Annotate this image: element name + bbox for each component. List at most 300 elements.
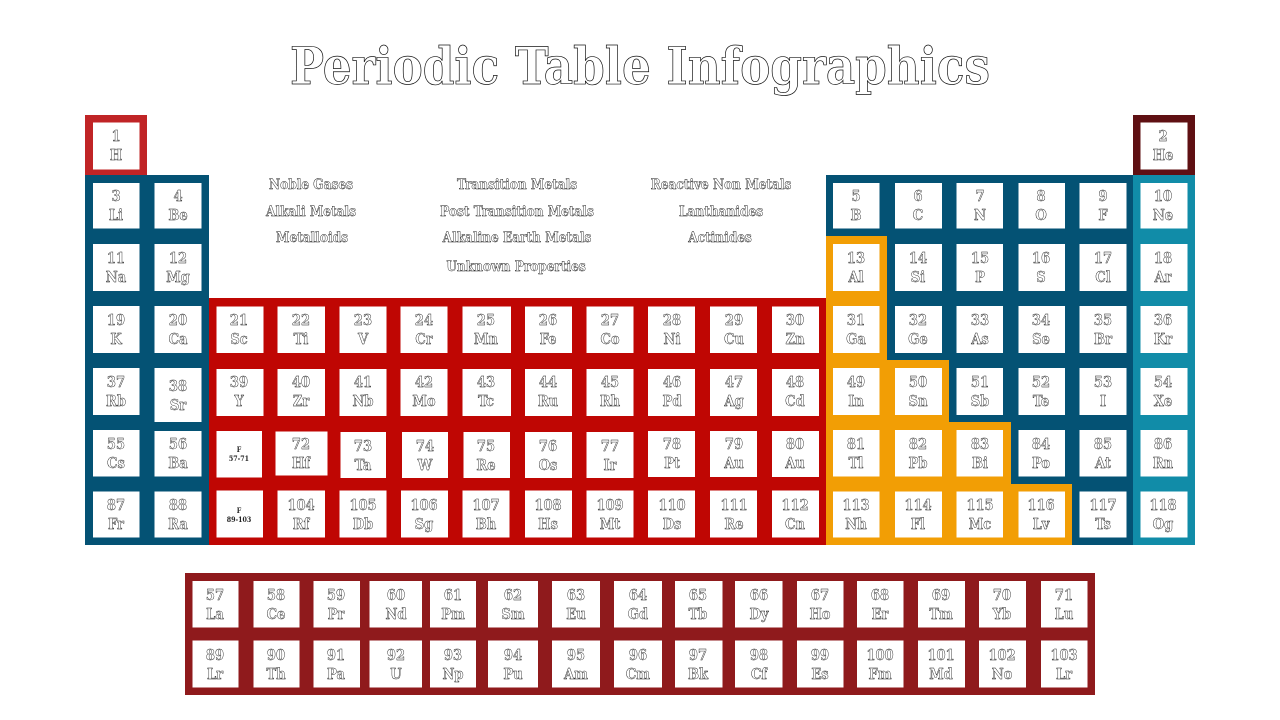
element: Ag: 47 <box>725 374 743 391</box>
element: Es <box>797 640 844 688</box>
element: Pt: 78 <box>663 436 681 453</box>
element: Sb: 51 <box>971 374 989 391</box>
element: Eu: 63 <box>567 587 585 604</box>
element: I <box>1080 368 1126 415</box>
element: Ta <box>340 432 386 478</box>
element: Yb: 70 <box>993 587 1011 604</box>
legend: category names: Post Transition Metals <box>440 204 594 220</box>
element: Lu: 71 <box>1055 587 1073 604</box>
element: N: 7 <box>975 188 985 205</box>
element: Bh: Bh <box>476 516 497 533</box>
element: S <box>1018 244 1065 291</box>
element: Hs <box>525 490 572 538</box>
element: Rh: 45 <box>601 374 619 391</box>
panel: reactive non metals <box>826 175 1133 545</box>
panel: alkali and alkaline metals <box>85 175 209 545</box>
element: Pa: 91 <box>327 647 345 664</box>
element: Fr: Fr <box>108 516 125 533</box>
element: Cd <box>772 369 819 416</box>
element: Mo <box>400 369 448 416</box>
element: Md: Md <box>929 666 953 683</box>
element: Er <box>857 581 904 628</box>
element: Eu <box>552 581 600 628</box>
element: Os: 76 <box>539 438 557 455</box>
element: Fr <box>93 492 140 538</box>
element: Br: 35 <box>1094 312 1112 329</box>
element: Li: Li <box>109 207 123 224</box>
element: Zn: Zn <box>785 331 805 348</box>
element: actinide placeholder <box>216 490 263 538</box>
element: Kr: Kr <box>1154 331 1173 348</box>
element: Se: 34 <box>1032 312 1050 329</box>
element: In: 49 <box>847 374 865 391</box>
element: Am: 95 <box>567 647 585 664</box>
element: W: W <box>417 457 433 474</box>
element: Ir: Ir <box>604 457 618 474</box>
element: Tm: Tm <box>929 606 953 623</box>
element: P: P <box>975 269 985 286</box>
element: Fe: Fe <box>540 331 556 348</box>
element: Th: Th <box>266 666 286 683</box>
element: Lv: 116 <box>1027 497 1055 514</box>
element: W: 74 <box>416 438 434 455</box>
element: In <box>833 368 880 415</box>
element: Pr: 59 <box>327 587 345 604</box>
element: Cm: 96 <box>629 647 647 664</box>
element: Re: Re <box>476 457 496 474</box>
element: Md <box>918 640 965 688</box>
element: Hg: Au <box>784 455 805 472</box>
element: Pb <box>895 430 942 476</box>
element: Xe <box>1140 368 1188 415</box>
element: K: 19 <box>107 312 125 329</box>
element: Fm: Fm <box>868 666 892 683</box>
element: Am: Am <box>563 666 588 683</box>
element: Sc <box>216 306 264 353</box>
element: Ir: 77 <box>601 438 619 455</box>
element: B: B <box>850 207 862 224</box>
element: Lr: 103 <box>1050 647 1078 664</box>
element: Au <box>710 431 757 477</box>
element: Sg: Sg <box>415 516 433 533</box>
element: La: 57 <box>206 587 224 604</box>
element: Cr <box>400 306 448 353</box>
element: Dy <box>735 581 782 628</box>
element: Kr: 36 <box>1154 312 1172 329</box>
element: Cm <box>614 640 662 688</box>
element: He: He <box>1153 147 1173 164</box>
element: Ru <box>525 369 572 416</box>
element: Cl: 17 <box>1094 250 1112 267</box>
element: Fr: 87 <box>107 497 125 514</box>
element: K <box>93 306 140 353</box>
element: Np: Np <box>442 666 464 683</box>
element: actinide placeholder: 89-103 <box>227 515 251 524</box>
element: Sr: 38 <box>169 378 187 395</box>
element: Np: 93 <box>444 647 462 664</box>
element: U <box>370 640 422 688</box>
element: B <box>833 183 880 228</box>
element: C: C <box>913 207 923 224</box>
element: Pa: Pa <box>327 666 345 683</box>
element: Ca: Ca <box>169 331 188 348</box>
element: F: F <box>1098 207 1108 224</box>
element: Au: Au <box>723 455 744 472</box>
element: Cd: Cd <box>785 393 805 410</box>
element: Tb: 65 <box>689 587 707 604</box>
element: Db: Db <box>353 516 373 533</box>
element: Po: Po <box>1032 455 1050 472</box>
element: Nh: 113 <box>842 497 870 514</box>
element: Br: Br <box>1094 331 1113 348</box>
element: V: V <box>357 331 369 348</box>
element: Ds <box>648 490 695 538</box>
element: Tm <box>918 581 965 628</box>
element: Sr: Sr <box>170 397 187 414</box>
element: C: 6 <box>913 188 923 205</box>
element: K: K <box>110 331 122 348</box>
element: Kr <box>1140 306 1188 353</box>
element: Es: Es <box>811 666 829 683</box>
element: Te: Te <box>1033 393 1049 410</box>
element: Hg: 80 <box>786 436 804 453</box>
legend: category names: Lanthanides <box>679 204 763 220</box>
element: Pu <box>488 640 538 688</box>
element: Ru: 44 <box>539 374 557 391</box>
element: Ds: 110 <box>658 497 686 514</box>
element: Ge: 32 <box>909 312 927 329</box>
element: Md: 101 <box>927 647 955 664</box>
element: Fe: 26 <box>539 312 557 329</box>
element: Se: Se <box>1032 331 1050 348</box>
element: Hf: 72 <box>292 436 310 453</box>
title: Periodic Table Infographics <box>290 37 990 97</box>
element: Sg <box>401 490 448 538</box>
element: No: No <box>992 666 1013 683</box>
element: Yb: Yb <box>992 606 1011 623</box>
element: Rf: Rf <box>293 516 311 533</box>
element: Lu: Lu <box>1055 606 1074 623</box>
element: Tc: 43 <box>477 374 495 391</box>
element: Rn: Rn <box>1153 455 1174 472</box>
element: Sb: Sb <box>971 393 989 410</box>
element: Fe <box>525 306 572 353</box>
element: Pa <box>314 640 360 688</box>
element: Zn: 30 <box>786 312 804 329</box>
element: Cf: 98 <box>750 647 768 664</box>
element: No <box>979 640 1026 688</box>
element: F: 9 <box>1098 188 1108 205</box>
element: Tl <box>833 430 880 476</box>
element: Bi <box>956 430 1003 476</box>
element: At: At <box>1094 455 1111 472</box>
element: Lr: Lr <box>1056 666 1073 683</box>
element: Pm <box>430 581 476 628</box>
element: Ag <box>710 369 757 416</box>
element: Tc <box>462 369 511 416</box>
element: Sn: 50 <box>909 374 927 391</box>
element: As: 33 <box>971 312 989 329</box>
element: Cn: 112 <box>781 497 809 514</box>
element: H: H <box>110 147 122 164</box>
element: No: 102 <box>988 647 1016 664</box>
element: Nd: Nd <box>385 606 407 623</box>
element: Sb <box>956 368 1003 415</box>
element: Tb <box>675 581 722 628</box>
element: lanthanide placeholder <box>216 431 262 478</box>
element: lanthanide placeholder: F <box>237 445 242 454</box>
element: Na: 11 <box>107 250 125 267</box>
element: Ni <box>648 306 695 353</box>
element: C <box>895 183 942 228</box>
element: Ba: Ba <box>168 455 188 472</box>
element: N <box>956 183 1003 228</box>
element: Mn <box>462 306 511 353</box>
element: Be <box>154 183 202 228</box>
element: Ce <box>254 581 300 628</box>
element: Lu <box>1041 581 1088 628</box>
element: Cn <box>772 490 819 538</box>
element: Lr (89): Lr <box>207 666 224 683</box>
legend: category names: Unknown Properties <box>446 259 586 275</box>
element: Nd <box>370 581 422 628</box>
element: Np <box>430 640 476 688</box>
element: Ne: 10 <box>1154 188 1172 205</box>
element: Ba: 56 <box>169 436 187 453</box>
element: Pd <box>648 369 695 416</box>
element: Xe: 54 <box>1154 374 1172 391</box>
element: Sr <box>154 368 202 422</box>
element: Nh: Nh <box>845 516 867 533</box>
element: La <box>192 581 238 628</box>
element: Tl: Tl <box>849 455 863 472</box>
element: Ra: Ra <box>168 516 188 533</box>
element: Rh <box>586 369 634 416</box>
element: Be: 4 <box>173 188 183 205</box>
element: Si: Si <box>911 269 925 286</box>
element: Y: Y <box>233 393 244 410</box>
element: N: N <box>974 207 986 224</box>
element: H: 1 <box>111 128 121 145</box>
legend: category names <box>265 177 792 275</box>
element: Og <box>1140 492 1188 538</box>
element: Fm <box>857 640 904 688</box>
element: Ir <box>586 432 634 478</box>
element: Sn <box>895 368 942 415</box>
element: Os <box>525 432 572 478</box>
element: Bk: Bk <box>688 666 709 683</box>
element: Mc: Mc <box>969 516 991 533</box>
element: S: 16 <box>1032 250 1050 267</box>
element: Ti: 22 <box>292 312 310 329</box>
element: Yb <box>979 581 1026 628</box>
element: Dy: Dy <box>750 606 769 623</box>
element: Ce: Ce <box>267 606 285 623</box>
element: Rf <box>278 490 325 538</box>
element: Ba <box>154 431 202 476</box>
element: Zr: Zr <box>293 393 310 410</box>
element: Nb: Nb <box>352 393 374 410</box>
panel: helium <box>1133 115 1195 176</box>
element: Am <box>552 640 600 688</box>
panel: noble gases <box>1133 175 1195 545</box>
element: Ar: Ar <box>1154 269 1173 286</box>
element: H <box>93 122 140 170</box>
element: Rb <box>93 368 140 415</box>
element: Bk <box>675 640 722 688</box>
legend: category names: Transition Metals <box>457 177 577 193</box>
element: Mc: 115 <box>966 497 994 514</box>
element: Ho <box>797 581 844 628</box>
legend: category names: Metalloids <box>276 230 348 246</box>
element: Cl <box>1080 244 1126 291</box>
element: Mt: 109 <box>596 497 624 514</box>
element: Bi: Bi <box>972 455 988 472</box>
element: Ra <box>154 492 202 538</box>
element: Pd: 46 <box>663 374 681 391</box>
element: Hs: 108 <box>534 497 562 514</box>
element: Ar: 18 <box>1154 250 1172 267</box>
element: Rn: 86 <box>1154 436 1172 453</box>
element: Mg: 12 <box>169 250 187 267</box>
element: Cr: Cr <box>415 331 434 348</box>
element: Mn: 25 <box>477 312 495 329</box>
element: O <box>1018 183 1065 228</box>
element: Re (111): 111 <box>720 497 748 514</box>
legend: category names: Alkaline Earth Metals <box>442 230 591 246</box>
element: Rb: 37 <box>107 374 125 391</box>
element: Ca: 20 <box>169 312 187 329</box>
element: Ga: Ga <box>846 331 866 348</box>
element: Re (111): Re <box>724 516 744 533</box>
element: Mt <box>586 490 634 538</box>
element: Pb: Pb <box>909 455 927 472</box>
element: As: As <box>970 331 989 348</box>
element: Ts: Ts <box>1095 516 1111 533</box>
element: Mg <box>154 244 202 291</box>
element: Ta: 73 <box>354 438 372 455</box>
element: Re (111) <box>710 490 757 538</box>
panel: lanthanides and actinides <box>185 573 1095 695</box>
element: Fl <box>895 492 942 538</box>
element: Lr (89) <box>192 640 238 688</box>
element: Re <box>464 432 510 478</box>
legend: category names: Actinides <box>687 230 752 246</box>
element: Pr: Pr <box>328 606 345 623</box>
element: Cf <box>735 640 782 688</box>
element: Eu: Eu <box>566 606 586 623</box>
element: Re: 75 <box>477 438 495 455</box>
element: Pu: Pu <box>503 666 523 683</box>
element: Cs: 55 <box>107 436 125 453</box>
element: U: 92 <box>387 647 405 664</box>
element: Hf <box>276 432 328 476</box>
element: Sc: 21 <box>230 312 248 329</box>
element: Ra: 88 <box>169 497 187 514</box>
element: Ds: Ds <box>663 516 681 533</box>
element: Y <box>216 369 264 416</box>
element: Ge: Ge <box>908 331 928 348</box>
element: Gd: 64 <box>629 587 647 604</box>
element: Ti: Ti <box>294 331 308 348</box>
element: Nb: 41 <box>354 374 372 391</box>
element: Zr <box>278 369 325 416</box>
element: Au: 79 <box>725 436 743 453</box>
element: Nh <box>833 492 880 538</box>
element: Cu: Cu <box>724 331 744 348</box>
element: Si: 14 <box>909 250 927 267</box>
element: Sc: Sc <box>230 331 248 348</box>
element: Nb <box>340 369 386 416</box>
element: Mn: Mn <box>474 331 498 348</box>
element: Br <box>1080 306 1126 353</box>
element: Th <box>254 640 300 688</box>
element: Fm: 100 <box>866 647 894 664</box>
element: Rn <box>1140 430 1188 476</box>
element: Co: Co <box>600 331 620 348</box>
element: Cd: 48 <box>786 374 804 391</box>
panel: hydrogen <box>85 115 147 176</box>
element: Db <box>340 490 386 538</box>
element: B: 5 <box>851 188 861 205</box>
element: Lv <box>1018 492 1065 538</box>
element: Ru: Ru <box>538 393 559 410</box>
legend: category names: Reactive Non Metals <box>651 177 792 193</box>
element: F <box>1080 183 1126 228</box>
element: Pm: Pm <box>441 606 465 623</box>
element: Zr: 40 <box>292 374 310 391</box>
element: Cl: Cl <box>1095 269 1111 286</box>
element: At <box>1080 430 1126 476</box>
element: Ga: 31 <box>847 312 865 329</box>
element: Pd: Pd <box>663 393 681 410</box>
element: Cu <box>710 306 757 353</box>
element: Co <box>586 306 634 353</box>
element: Th: 90 <box>267 647 285 664</box>
element: Pt <box>648 431 695 477</box>
element: Po <box>1018 430 1065 476</box>
element: Lr <box>1041 640 1088 688</box>
element: Ho: 67 <box>811 587 829 604</box>
element: Ho: Ho <box>809 606 831 623</box>
element: Ca <box>154 306 202 353</box>
element: Ne <box>1140 183 1188 228</box>
element: Fl: 114 <box>904 497 932 514</box>
element: Pr <box>314 581 360 628</box>
element: Sm: Sm <box>501 606 525 623</box>
element: La: La <box>206 606 224 623</box>
element: Y: 39 <box>230 374 248 391</box>
legend: category names: Alkali Metals <box>265 204 356 220</box>
element: Na: Na <box>106 269 127 286</box>
element: P <box>956 244 1003 291</box>
element: Rh: Rh <box>600 393 621 410</box>
element: Cs <box>93 430 140 476</box>
element: Nd: 60 <box>387 587 405 604</box>
element: Ts: 117 <box>1089 497 1117 514</box>
element: Be: Be <box>168 207 188 224</box>
element: Os: Os <box>539 457 557 474</box>
element: Pm: 61 <box>444 587 462 604</box>
element: At: 85 <box>1094 436 1112 453</box>
element: Sm <box>488 581 538 628</box>
panel: transition metals <box>209 298 826 545</box>
element: Rf: 104 <box>287 497 315 514</box>
element: Ga <box>833 306 880 353</box>
element: Al: Al <box>847 269 864 286</box>
element: Er: 68 <box>871 587 889 604</box>
element: Hf: Hf <box>292 455 311 472</box>
